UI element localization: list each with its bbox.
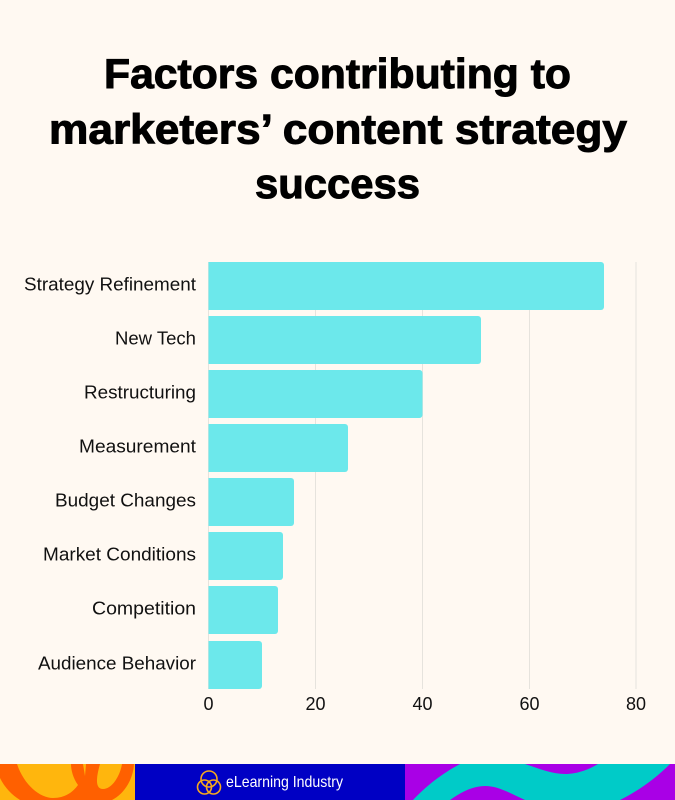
category labels: Audience Behavior [38,652,196,674]
axis labels: 80 [626,694,646,714]
title: Factors contributing to [104,50,571,97]
icon: logo [198,771,220,794]
category labels: Budget Changes [55,490,196,510]
category labels: Measurement [79,436,196,456]
category labels: Restructuring [84,382,196,402]
title [49,50,628,207]
axis labels: 0 [203,694,214,714]
axis labels: 20 [305,694,326,714]
category labels: New Tech [115,328,196,348]
footer: orange panel [0,764,135,800]
axis labels: 40 [412,694,433,714]
footer band [0,764,675,800]
category labels [24,274,196,674]
title: marketers’ content strategy [49,106,628,152]
footer: purple and teal panel [405,764,675,800]
category labels: Strategy Refinement [24,274,196,294]
footer: blue panel [135,764,405,800]
axis labels: 60 [519,694,540,714]
axis labels [203,694,646,714]
bars [208,262,604,689]
logo text: eLearning Industry [226,774,343,791]
category labels: Market Conditions [43,544,196,564]
category labels: Competition [92,598,196,618]
bar chart [24,262,646,714]
title: success [255,160,420,207]
